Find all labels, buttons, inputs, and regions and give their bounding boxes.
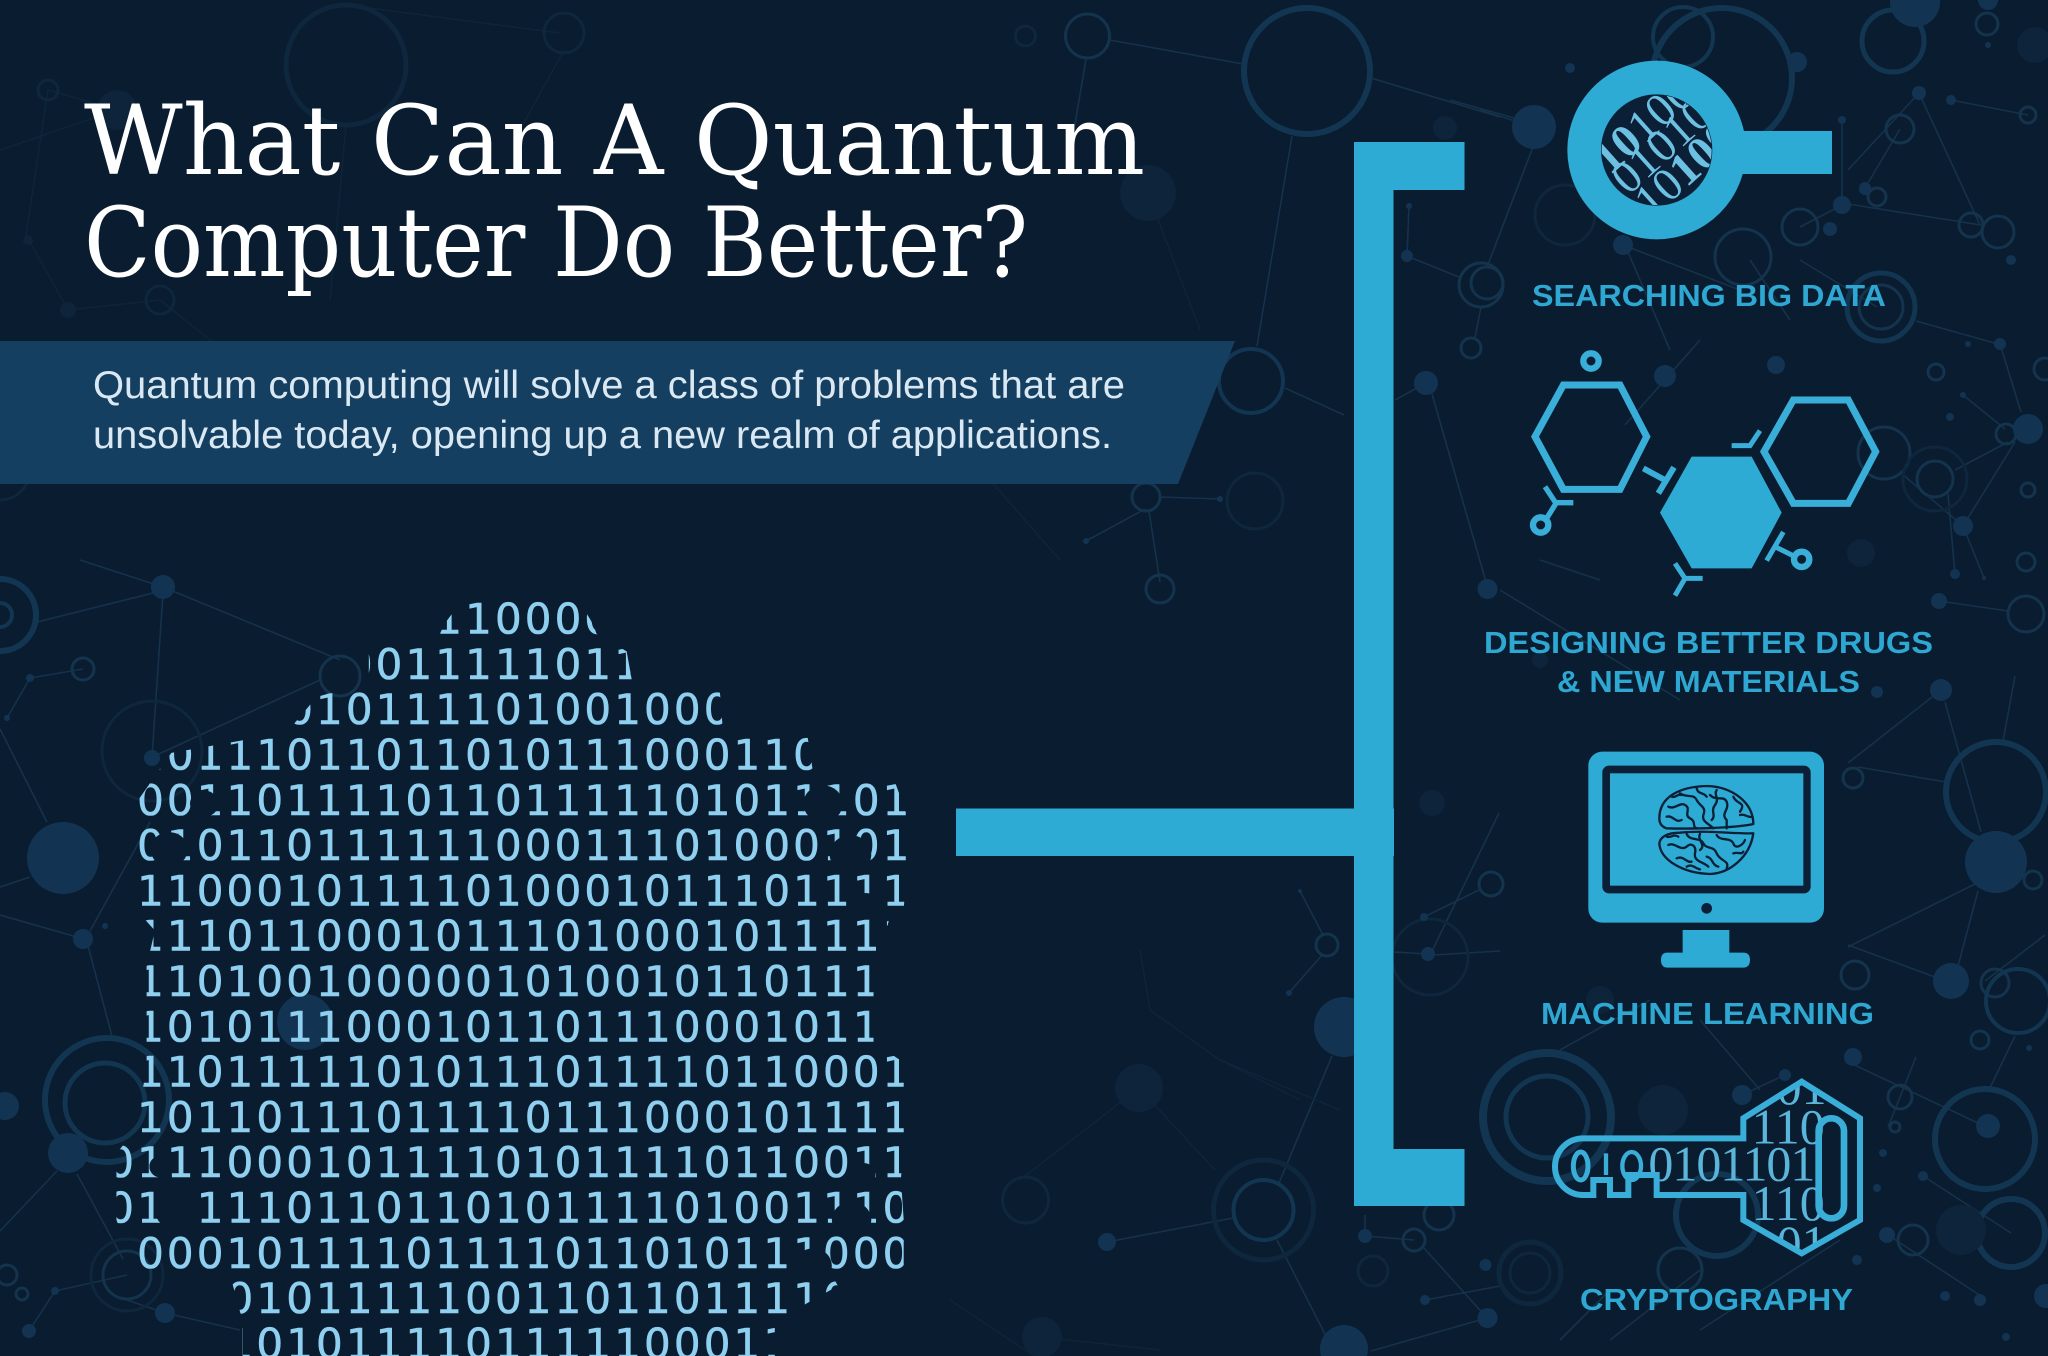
icon: magnifying glass over binary: 10100 xyxy=(1583,67,1704,184)
binary digits in the shape of a quantum cluster xyxy=(107,595,912,1356)
icon: key with binary digits: 110 xyxy=(1752,1098,1825,1154)
binary digits in the shape of a quantum cluster: 00001011111001101101111000 xyxy=(137,1274,912,1323)
binary digits in the shape of a quantum cluster: 011111011011010111101001110 xyxy=(107,1184,912,1232)
connector bracket xyxy=(956,142,1464,1206)
icon: key with binary digits xyxy=(1552,1078,1863,1257)
icon: molecule hexagons xyxy=(1533,353,1876,596)
icon: magnifying glass over binary: 01010 xyxy=(1601,87,1722,204)
binary digits in the shape of a quantum cluster: 00000010111101001000000000 xyxy=(137,685,912,734)
binary digits in the shape of a quantum cluster: 10101110001011011100010111 xyxy=(137,1002,912,1051)
label: SEARCHING BIG DATA xyxy=(1532,278,1886,313)
icon: magnifying glass over binary: 10100 xyxy=(1624,111,1746,228)
binary digits in the shape of a quantum cluster: 10111011011010111000110010 xyxy=(137,730,912,780)
binary digits in the shape of a quantum cluster: 00010111101111011010111000 xyxy=(137,1229,912,1278)
label: MACHINE LEARNING xyxy=(1541,996,1874,1031)
binary digits in the shape of a quantum cluster: 11101100010111010001011111 xyxy=(137,912,912,961)
icon: key with binary digits: 01 xyxy=(1777,1059,1827,1115)
label xyxy=(1484,625,1933,699)
title: What Can A Quantum xyxy=(84,85,1145,197)
intro text: unsolvable today, opening up a new realm of applications. xyxy=(93,414,1112,457)
application: searching big data xyxy=(1532,61,1886,313)
application: cryptography xyxy=(1555,1059,1860,1317)
banner with intro text xyxy=(0,341,1235,484)
title xyxy=(84,85,1145,299)
intro text: Quantum computing will solve a class of problems that are xyxy=(93,364,1125,407)
title: Computer Do Better? xyxy=(84,187,1028,299)
icon: key with binary digits: 01 xyxy=(1777,1215,1827,1271)
binary digits in the shape of a quantum cluster: 00000000011111011100000000 xyxy=(137,640,912,689)
icon: magnifying glass over binary xyxy=(1567,61,1832,239)
label: CRYPTOGRAPHY xyxy=(1580,1282,1853,1317)
icon: key with binary digits: 0101101 xyxy=(1648,1136,1814,1192)
application: machine learning xyxy=(1541,752,1874,1031)
binary digits in the shape of a quantum cluster: 10110111011110111000101111 xyxy=(137,1093,912,1142)
label: DESIGNING BETTER DRUGS xyxy=(1484,625,1933,660)
icon: key with binary digits: 110 xyxy=(1752,1175,1825,1231)
icon: computer monitor with brain xyxy=(1588,752,1824,968)
application: designing better drugs and new materials xyxy=(1484,353,1933,699)
binary digits in the shape of a quantum cluster: 00000000001100001010000000 xyxy=(137,595,912,644)
label: & NEW MATERIALS xyxy=(1557,664,1860,699)
binary digits in the shape of a quantum cluster: 011100010111101011110110011 xyxy=(107,1138,912,1187)
binary digits in the shape of a quantum cluster: 11011111010111011110110001 xyxy=(137,1048,912,1097)
intro text xyxy=(93,364,1125,457)
binary digits in the shape of a quantum cluster: 00110111101101111101011101 xyxy=(137,776,912,825)
binary digits in the shape of a quantum cluster: 11000101111010001011101111 xyxy=(137,866,912,915)
binary digits in the shape of a quantum cluster: 11010010000010100101101111 xyxy=(137,957,912,1006)
binary digits in the shape of a quantum cluster: 01011011111100011101000101 xyxy=(137,821,912,870)
